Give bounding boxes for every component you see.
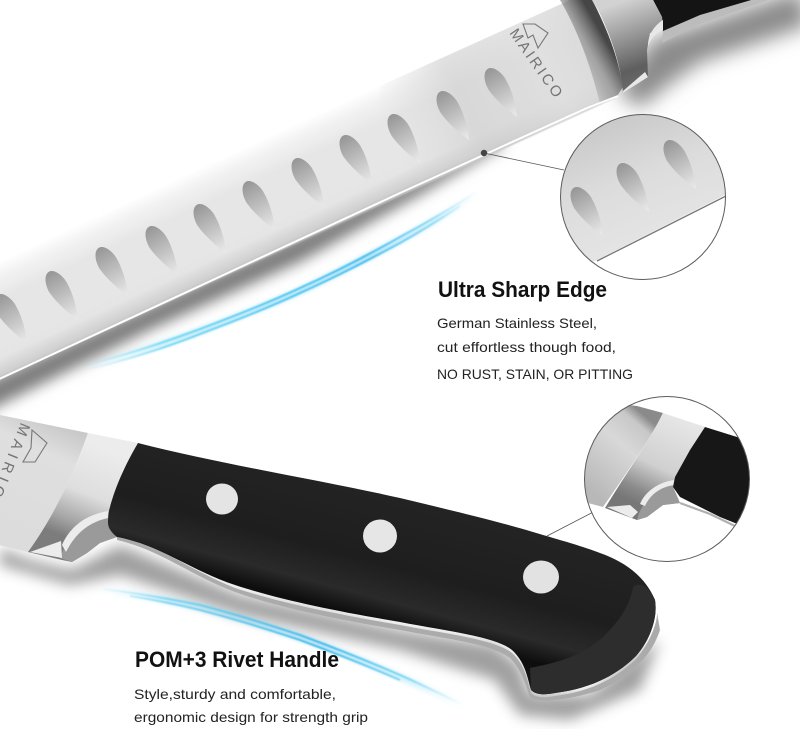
text block: handle description: Style,sturdy and comfortable, <box>134 686 336 702</box>
bottom knife <box>0 414 660 701</box>
callout dot <box>481 150 487 156</box>
heading: POM+3 Rivet Handle: POM+3 Rivet Handle <box>135 647 339 672</box>
circle bolster <box>605 413 705 520</box>
rivet 3 <box>523 560 559 594</box>
blade brushed steel tone <box>380 0 623 205</box>
circle bolster neck <box>637 483 680 520</box>
text block: blade description <box>437 315 633 382</box>
bolster neck <box>60 515 117 562</box>
lower blade <box>0 414 88 552</box>
circle handle <box>673 427 749 524</box>
top knife <box>0 0 774 381</box>
brand text: MAIRICO <box>506 26 566 101</box>
logo mark lower <box>23 430 47 462</box>
dimples <box>0 64 525 348</box>
dark band before bolster <box>560 0 623 104</box>
bolster highlight <box>30 511 108 558</box>
bolster <box>592 0 663 93</box>
lower bolster <box>28 433 138 562</box>
handle silver underside <box>117 537 660 701</box>
upper blue swoosh <box>80 190 480 369</box>
lower blue swoosh <box>103 589 465 707</box>
circle blade <box>585 405 663 507</box>
handle silver edge <box>662 0 774 43</box>
rivet 2 <box>363 520 397 552</box>
shadow under top knife <box>0 0 800 415</box>
shadow under bottom knife <box>0 545 660 720</box>
callout line top <box>481 150 564 170</box>
bolster highlights <box>623 20 663 93</box>
text block: handle description <box>134 686 368 725</box>
zoom circle: bolster and handle <box>584 396 750 562</box>
text block: blade description: cut effortless though food, <box>437 339 616 355</box>
rivet 1 <box>206 484 238 514</box>
heading: Ultra Sharp Edge: Ultra Sharp Edge <box>438 277 607 302</box>
text block: handle description: ergonomic design for strength grip <box>134 709 368 725</box>
logo mark <box>523 24 548 48</box>
callout line bottom <box>547 507 603 536</box>
handle butt cap <box>530 585 656 694</box>
text block: blade description: NO RUST, STAIN, OR PITTING <box>437 366 633 382</box>
text block: blade description: German Stainless Steel, <box>437 315 597 331</box>
zoom circle: blade edge <box>560 114 726 280</box>
blade <box>0 0 623 381</box>
handle <box>108 443 656 694</box>
handle top <box>652 0 758 32</box>
cutting edge <box>0 96 618 381</box>
